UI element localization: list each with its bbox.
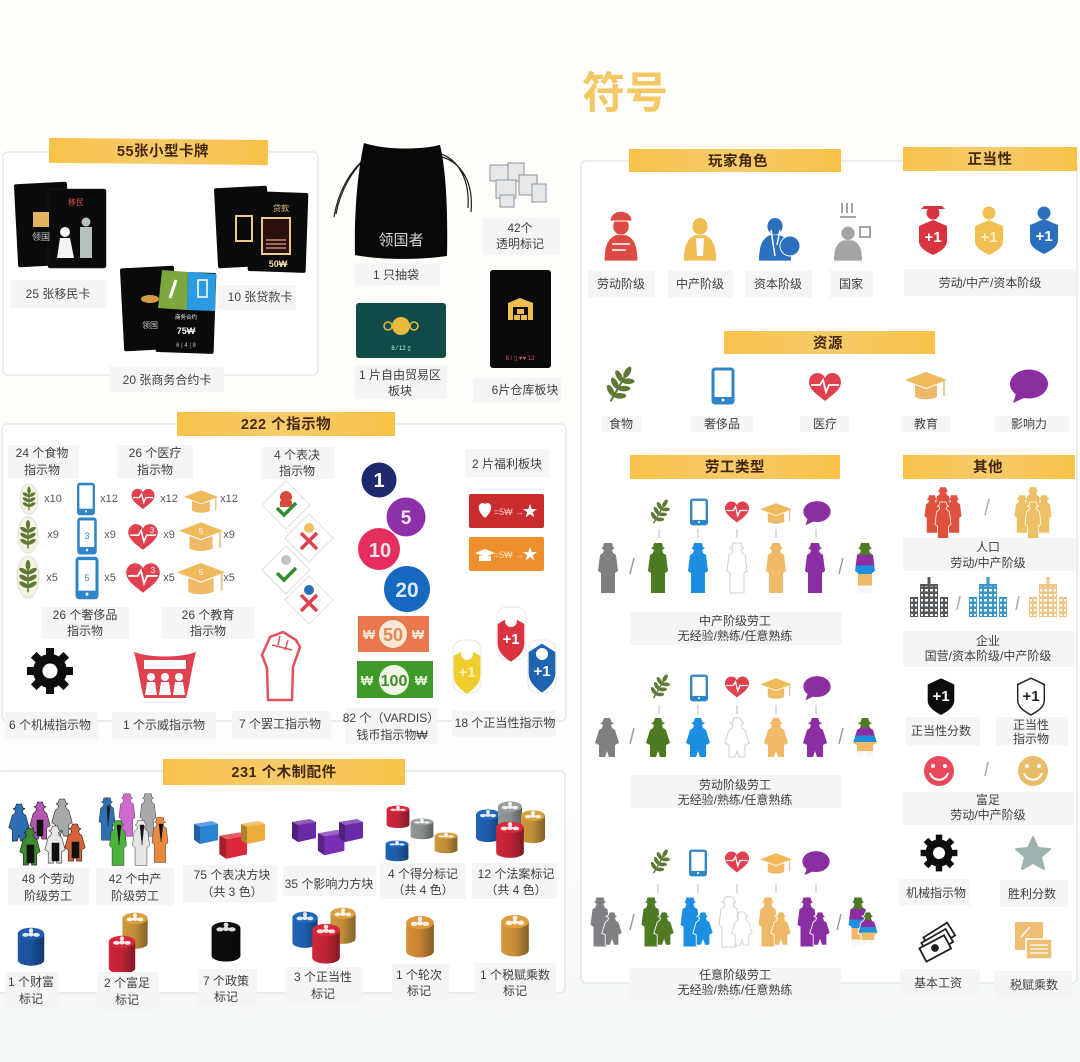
- legitimacy tokens: +1: [502, 631, 520, 648]
- icon: influence: [1010, 370, 1048, 403]
- label: bag: 1 只抽袋: [373, 268, 419, 282]
- education token rows: x9: [223, 529, 235, 541]
- warehouse board: 8 / ▯ ♥♥ 12: [506, 356, 535, 362]
- label: tax multiplier: [994, 971, 1072, 998]
- label: middle class workers: 42 个中产: [109, 871, 161, 886]
- education token rows: [177, 490, 238, 594]
- influence cubes: [292, 819, 363, 855]
- label: any class workers: 无经验/熟练/任意熟练: [678, 982, 792, 997]
- strike fist token: [262, 632, 300, 700]
- label: any class workers: 任意阶级劳工: [699, 967, 771, 982]
- label: tax multiplier marker: [475, 963, 556, 1000]
- label: immigration cards: [11, 280, 107, 308]
- label: medical tokens: 指示物: [137, 462, 173, 477]
- transparent markers: [490, 163, 546, 207]
- money coins: [358, 462, 430, 612]
- middle class meeples: [99, 794, 168, 866]
- heading: 222 tokens: [177, 412, 395, 436]
- icon: education: [905, 372, 947, 399]
- money coins: 1: [373, 470, 385, 492]
- label: population: 劳动/中产阶级: [950, 555, 1026, 570]
- money banknotes: [357, 616, 433, 698]
- label: influence: [995, 416, 1069, 432]
- luxury token rows: x5: [104, 572, 116, 584]
- label: working class workers: 无经验/熟练/任意熟练: [678, 792, 792, 807]
- label: prosperity: [902, 792, 1074, 825]
- medical token rows: 3: [151, 566, 156, 575]
- warehouse board: [490, 270, 551, 368]
- label: tax multiplier marker: 1 个税赋乘数: [480, 967, 550, 982]
- food token rows: x9: [47, 529, 59, 541]
- welfare boards: [469, 494, 544, 571]
- label: vote tokens: [261, 447, 334, 479]
- middle class worker row: [598, 495, 875, 593]
- demonstration token: [134, 652, 196, 698]
- luxury token rows: 5: [84, 573, 90, 583]
- food token rows: x5: [46, 572, 58, 584]
- label: companies: 国营/资本阶级/中产阶级: [925, 648, 1051, 663]
- label: legitimacy classes: 劳动/中产/资本阶级: [939, 275, 1041, 290]
- label: prosperity markers: 2 个富足: [104, 975, 150, 990]
- free trade board: 8 ⁄ 12 ▯: [391, 346, 411, 352]
- working class worker row: [595, 670, 877, 757]
- label: welfare boards: [465, 449, 549, 477]
- label: legitimacy score: [906, 717, 980, 746]
- legitimacy tokens: +1: [458, 664, 476, 681]
- label: state: 国家: [839, 276, 863, 291]
- icon: state: [834, 203, 870, 261]
- label: medical tokens: [117, 445, 193, 478]
- legitimacy shields: [919, 206, 1058, 255]
- label: machine token: [899, 879, 970, 906]
- money banknotes: ₩: [415, 673, 428, 688]
- vote tokens: [262, 481, 333, 624]
- label: wealth marker: [5, 972, 59, 1008]
- label: money tokens: 钱币指示物₩: [356, 727, 428, 742]
- label: welfare boards: 2 片福利板块: [472, 456, 542, 471]
- heading: other: [903, 455, 1075, 479]
- legitimacy shields: +1: [980, 229, 998, 246]
- label: working class workers: 劳动阶级劳工: [699, 778, 771, 792]
- label: strike tokens: 7 个罢工指示物: [239, 716, 321, 731]
- icon: victory point: [1016, 837, 1050, 869]
- label: bag: [355, 263, 440, 285]
- vote cubes: [194, 821, 265, 859]
- food token rows: [17, 484, 62, 598]
- label: capital class: 资本阶级: [754, 277, 802, 291]
- icon: legitimacy score: +1: [932, 688, 950, 705]
- label: legitimacy markers: 标记: [311, 987, 335, 1001]
- label: loan cards: 10 张贷款卡: [228, 290, 292, 304]
- any class worker row: [590, 845, 878, 947]
- score markers: [386, 806, 457, 861]
- label: companies: [903, 631, 1075, 667]
- label: education tokens: 指示物: [190, 623, 226, 638]
- money coins: 20: [395, 579, 419, 602]
- icon: legitimacy token: +1: [1022, 688, 1040, 705]
- heading: resources: [724, 331, 935, 354]
- education token rows: x5: [223, 572, 235, 584]
- loan cards: [214, 186, 308, 273]
- education token rows: 5: [199, 527, 204, 536]
- business contract cards: 商务合约: [175, 313, 197, 321]
- icon: tax multiplier: [1015, 922, 1052, 959]
- label: base wage: [900, 969, 980, 996]
- heading: worker types: [630, 455, 840, 479]
- policy marker: [212, 922, 240, 962]
- label: influence cubes: 35 个影响力方块: [285, 876, 373, 891]
- label: capital class: [745, 270, 812, 298]
- medical token rows: x5: [163, 572, 175, 584]
- luxury token rows: [77, 484, 118, 598]
- heading: player roles: 玩家角色: [708, 152, 768, 170]
- label: vote tokens: 4 个表决: [274, 448, 320, 462]
- row figures: [595, 718, 877, 757]
- icon: base wage: [919, 923, 955, 962]
- loan cards: 贷款: [273, 203, 289, 213]
- money coins: 10: [369, 540, 391, 562]
- label: turn marker: [392, 964, 449, 1001]
- row icons: [646, 670, 831, 714]
- label: bill markers: [472, 863, 557, 899]
- label: education: [901, 416, 950, 432]
- label: luxury tokens: 26 个奢侈品: [53, 608, 117, 622]
- welfare boards: ★: [522, 546, 538, 563]
- immigration cards: [14, 182, 106, 268]
- label: transparent markers: 42个: [507, 221, 533, 235]
- row icons: [646, 845, 830, 893]
- label: legitimacy token: 指示物: [1013, 731, 1049, 746]
- tax multiplier marker: [501, 915, 529, 956]
- label: food tokens: 指示物: [24, 462, 60, 477]
- immigration cards: 移民: [68, 197, 84, 207]
- row icons: [646, 495, 831, 538]
- heading: player roles: [629, 149, 841, 172]
- business contract cards: 75₩: [177, 326, 196, 336]
- label: any class workers: [629, 967, 841, 1001]
- label: luxury: [691, 416, 753, 432]
- label: victory point: [1000, 880, 1068, 907]
- heading: resources: 资源: [813, 335, 843, 352]
- label: bill markers: （共 4 色）: [485, 883, 547, 897]
- money banknotes: 100: [381, 673, 407, 690]
- label: luxury tokens: [42, 607, 129, 639]
- label: business contract cards: [110, 366, 224, 392]
- label: working class workers: 阶级劳工: [24, 889, 72, 903]
- bill markers: [476, 801, 545, 858]
- label: prosperity: 劳动/中产阶级: [950, 807, 1026, 822]
- legitimacy tokens: [453, 607, 556, 694]
- food token rows: x10: [44, 493, 62, 505]
- label: middle class workers: 中产阶级劳工: [699, 613, 771, 628]
- label: population: 人口: [976, 540, 1000, 554]
- label: middle class workers: [630, 612, 842, 645]
- label: prosperity markers: [97, 972, 159, 1010]
- label: machine token: 机械指示物: [906, 885, 966, 900]
- heading: wooden components: [163, 759, 405, 785]
- label: loan cards: [218, 285, 296, 310]
- label: demonstration token: 1 个示威指示物: [123, 717, 205, 732]
- free trade board: [356, 303, 446, 358]
- label: money tokens: 82 个（VARDIS）: [343, 711, 439, 725]
- money banknotes: 50: [383, 625, 403, 645]
- welfare boards: =5₩ →: [494, 550, 524, 560]
- label: money tokens: [343, 708, 439, 744]
- business contract cards: 领国: [142, 320, 158, 330]
- turn marker: [406, 916, 434, 957]
- heading: wooden components: 231 个木制配件: [231, 764, 337, 781]
- label: influence: 影响力: [1011, 416, 1047, 431]
- icon: working class: [605, 211, 637, 261]
- label: turn marker: 标记: [407, 984, 431, 998]
- education token rows: 5: [199, 568, 204, 577]
- title: 符号: [582, 70, 668, 118]
- medical token rows: x9: [163, 529, 175, 541]
- label: luxury: 奢侈品: [704, 417, 740, 431]
- business contract cards: [120, 266, 216, 354]
- label: legitimacy token: [996, 717, 1068, 746]
- label: prosperity: 富足: [976, 792, 1000, 807]
- label: population: [903, 538, 1076, 571]
- label: luxury tokens: 指示物: [67, 623, 103, 638]
- icon: luxury: [713, 369, 733, 403]
- label: middle class workers: 阶级劳工: [111, 889, 159, 903]
- label: legitimacy markers: [285, 967, 363, 1004]
- heading: 55 cards: 55张小型卡牌: [117, 143, 209, 160]
- label: working class: 劳动阶级: [597, 277, 645, 291]
- loan cards: 50₩: [269, 259, 288, 269]
- panel: 55 small cards: [3, 138, 318, 392]
- label: education tokens: 26 个教育: [182, 607, 234, 622]
- wealth marker: [18, 928, 44, 966]
- luxury token rows: 3: [84, 531, 90, 541]
- label: wealth marker: 标记: [19, 992, 43, 1006]
- label: tax multiplier: 税赋乘数: [1010, 977, 1058, 992]
- label: base wage: 基本工资: [914, 976, 962, 990]
- medical token rows: x12: [160, 493, 178, 505]
- icon: food: [600, 361, 641, 407]
- luxury token rows: x9: [104, 529, 116, 541]
- label: score markers: [380, 863, 466, 899]
- icon: population: [924, 487, 1052, 542]
- label: score markers: 4 个得分标记: [388, 866, 458, 881]
- label: policy markers: [198, 969, 257, 1006]
- money coins: 5: [401, 508, 412, 529]
- business contract cards: 6 | 4 | 8: [176, 343, 197, 349]
- icon: capital class: [759, 218, 800, 261]
- label: policy markers: 7 个政策: [203, 974, 249, 988]
- label: prosperity markers: 标记: [115, 993, 139, 1007]
- label: food tokens: [8, 445, 79, 478]
- label: medical tokens: 26 个医疗: [129, 446, 181, 460]
- heading: legitimacy: 正当性: [968, 150, 1012, 168]
- label: business contract cards: 20 张商务合约卡: [123, 372, 211, 387]
- luxury token rows: x12: [100, 493, 118, 505]
- icon: companies: [910, 577, 1067, 617]
- gear token: [27, 648, 73, 694]
- education token rows: x12: [220, 493, 238, 505]
- legitimacy tokens: +1: [533, 663, 551, 680]
- money banknotes: ₩: [361, 673, 374, 688]
- label: working class workers: [8, 868, 89, 906]
- label: warehouse board: 6片仓库板块: [492, 382, 558, 397]
- label: transparent markers: [483, 218, 560, 255]
- label: free trade board: 板块: [388, 384, 412, 398]
- heading: 55 cards: [49, 138, 268, 165]
- label: strike tokens: [232, 711, 331, 738]
- label: vote tokens: 指示物: [279, 463, 315, 478]
- label: machine tokens: [5, 712, 98, 739]
- label: legitimacy token: 正当性: [1013, 718, 1049, 732]
- label: food: 食物: [609, 416, 633, 431]
- icon: middle class: [684, 218, 716, 261]
- label: middle class: 中产阶级: [676, 276, 724, 291]
- money banknotes: ₩: [412, 627, 425, 642]
- label: legitimacy tokens: 18 个正当性指示物: [455, 715, 555, 730]
- label: turn marker: 1 个轮次: [396, 968, 442, 982]
- icon: machine token: [921, 835, 957, 871]
- label: victory point: 胜利分数: [1008, 886, 1056, 901]
- label: bill markers: 12 个法案标记: [478, 866, 554, 881]
- label: education: 教育: [914, 416, 938, 431]
- label: free trade board: [355, 366, 447, 399]
- label: medical: 医疗: [813, 417, 837, 431]
- label: legitimacy score: 正当性分数: [911, 723, 971, 738]
- label: warehouse board: [473, 378, 561, 402]
- label: state: [830, 270, 873, 298]
- label: middle class workers: [96, 868, 174, 906]
- immigration cards: 领国: [32, 231, 50, 242]
- heading: other: 其他: [973, 458, 1003, 476]
- welfare boards: ★: [522, 503, 538, 520]
- panel: 231 wooden components: [0, 759, 565, 1010]
- label: free trade board: 1 片自由贸易区: [359, 368, 441, 382]
- bag: [334, 143, 471, 259]
- label: working class workers: 48 个劳动: [22, 872, 74, 886]
- label: working class: [588, 270, 655, 298]
- panel: 222 tokens: [2, 412, 566, 744]
- legitimacy shields: +1: [924, 229, 942, 246]
- medical token rows: [126, 489, 178, 593]
- label: policy markers: 标记: [214, 990, 238, 1004]
- label: tax multiplier marker: 标记: [503, 984, 527, 998]
- label: food tokens: 24 个食物: [16, 445, 68, 460]
- label: transparent markers: 透明标记: [496, 237, 544, 251]
- label: vote cubes: [183, 865, 277, 902]
- heading: 222 tokens: 222 个指示物: [241, 415, 331, 433]
- label: influence cubes: [283, 866, 376, 896]
- label: demonstration token: [112, 712, 216, 739]
- icon: prosperity: [924, 756, 1048, 786]
- label: medical: [800, 416, 849, 432]
- label: legitimacy classes: [904, 269, 1077, 296]
- money banknotes: ₩: [363, 627, 376, 642]
- label: education tokens: [162, 607, 254, 639]
- label: vote cubes: （共 3 色）: [201, 885, 263, 899]
- heading: worker types: 劳工类型: [705, 459, 765, 476]
- label: middle class workers: 无经验/熟练/任意熟练: [678, 628, 792, 643]
- medical token rows: 3: [150, 526, 155, 535]
- label: machine tokens: 6 个机械指示物: [9, 717, 91, 732]
- label: score markers: （共 4 色）: [392, 883, 454, 897]
- working class meeples: [9, 799, 85, 865]
- label: legitimacy markers: 3 个正当性: [294, 970, 352, 984]
- label: food: [602, 416, 642, 432]
- legitimacy shields: +1: [1035, 228, 1053, 245]
- label: working class workers: [630, 775, 842, 808]
- legitimacy markers: [292, 908, 356, 964]
- row figures: [590, 897, 878, 947]
- icon: legitimacy token: [1018, 678, 1044, 715]
- label: middle class: [668, 270, 733, 298]
- panel: symbols: [581, 147, 1077, 1001]
- bag: 领国者: [378, 232, 424, 249]
- prosperity markers: [109, 913, 148, 974]
- label: companies: 企业: [976, 633, 1000, 648]
- icon: legitimacy score: [928, 678, 954, 715]
- label: legitimacy tokens: [452, 710, 556, 737]
- icon: medical: [809, 373, 841, 401]
- row figures: [598, 543, 875, 593]
- label: immigration cards: 25 张移民卡: [26, 287, 90, 301]
- label: wealth marker: 1 个财富: [8, 974, 54, 989]
- heading: legitimacy: [903, 147, 1077, 171]
- label: vote cubes: 75 个表决方块: [194, 867, 270, 882]
- welfare boards: =5₩ →: [494, 507, 524, 517]
